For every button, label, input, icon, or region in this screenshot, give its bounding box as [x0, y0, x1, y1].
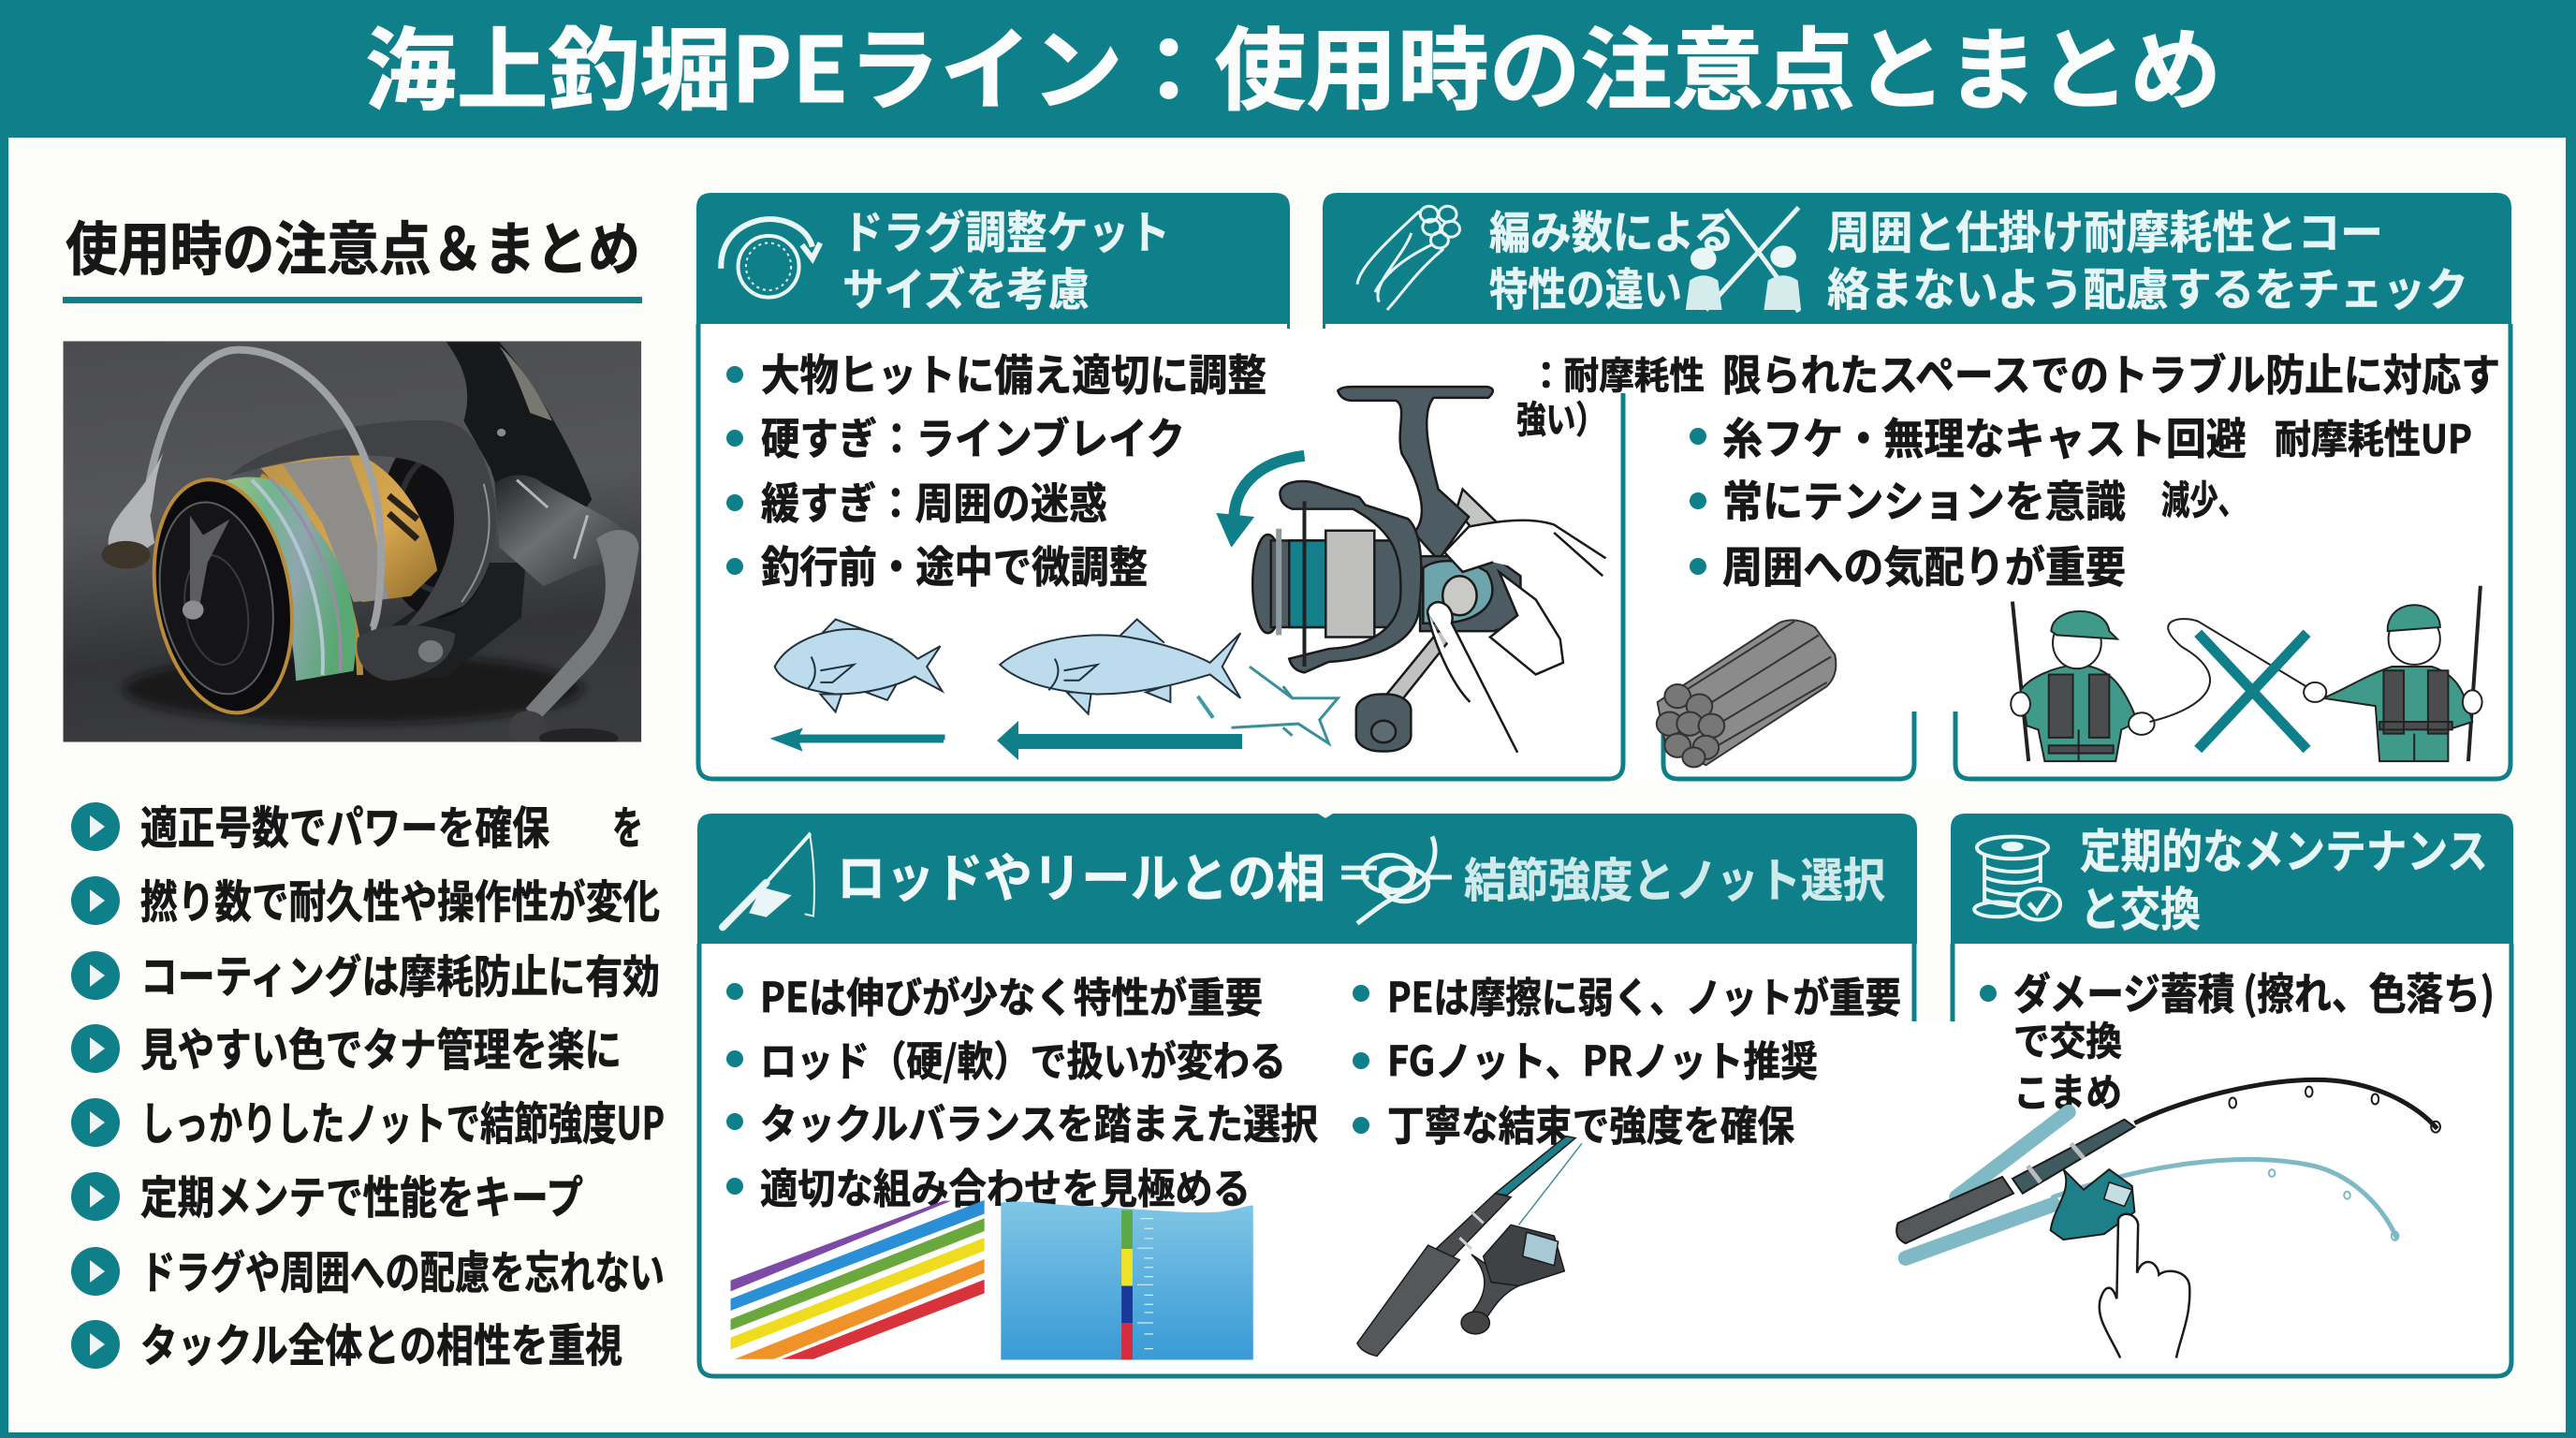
pointing hand — [2100, 1214, 2189, 1358]
panel body — [698, 324, 2510, 779]
overlay text: abrasion note: ：耐摩耗性 — [1529, 345, 1705, 400]
illustration: reel and hand adjusting drag — [1216, 387, 1606, 753]
list text: 定期メンテで性能をキープ — [140, 1161, 583, 1226]
arrow: large pull — [997, 721, 1242, 760]
list text: を — [612, 791, 643, 857]
bullets: drag: 緩すぎ：周囲の迷惑 — [761, 470, 1107, 532]
photo: spinning reel with multicolour PE line — [63, 341, 641, 748]
header: maintenance — [1951, 814, 2513, 944]
bullets: rod and reel — [726, 964, 1318, 1215]
list text — [140, 791, 665, 1374]
bullet dots — [726, 983, 743, 1195]
header text: knot: 結節強度とノット選択 — [1464, 844, 1885, 911]
bullet marker circles — [71, 802, 120, 1369]
icon: crossed-out anglers — [1686, 208, 1801, 312]
icon: drag dial — [721, 219, 820, 298]
panel: top row (drag adjustment / braid count / surroundings) — [696, 193, 2511, 779]
bullets: maintenance — [1980, 961, 2495, 1119]
bullets: maintenance: で交換 — [2013, 1010, 2122, 1067]
list text: しっかりしたノットで結節強度UP — [140, 1087, 665, 1152]
arrow: small pull — [774, 730, 944, 749]
header: braid count and line care: 特性の違い — [1489, 253, 1682, 318]
header text: 定期的なメンテナンス — [2080, 814, 2488, 882]
bullets: drag — [726, 342, 1266, 595]
X mark — [2198, 633, 2307, 749]
list text: 適正号数でパワーを確保 — [140, 791, 549, 857]
header text: ドラグ調整ケット — [842, 196, 1170, 261]
overlay text: abrasion note — [1516, 345, 1705, 444]
list text: コーティングは摩耗防止に有効 — [140, 940, 660, 1005]
icon: rod and reel — [723, 833, 814, 927]
bullets: drag: 硬すぎ：ラインブレイク — [761, 405, 1185, 467]
bullets: rod and reel: ロッド（硬/軟）で扱いが変わる — [760, 1028, 1286, 1088]
bullets: maintenance: こまめ — [2013, 1062, 2122, 1119]
bullet dots — [1353, 985, 1369, 1134]
icon: line spool with check — [1974, 837, 2060, 919]
list text: ドラグや周囲への配慮を忘れない — [140, 1236, 665, 1301]
bullets: surroundings — [1690, 342, 2500, 595]
left heading: 使用時の注意点＆まとめ — [66, 202, 640, 286]
bullets: knots: PEは摩擦に弱く、ノットが重要 — [1387, 964, 1901, 1024]
bullets: knots: 丁寧な結束で強度を確保 — [1387, 1093, 1794, 1152]
illustration: fish and drag arrows — [775, 620, 1338, 743]
panel body — [699, 944, 2511, 1376]
rod shadow — [1906, 1112, 2398, 1258]
bullets: surroundings: 糸フケ・無理なキャスト回避 — [1722, 405, 2247, 467]
panel borders — [699, 944, 2511, 1376]
panel borders — [698, 324, 2510, 779]
bullets: knots — [1353, 964, 1901, 1152]
header: rod & reel match and knot selection — [697, 814, 1917, 944]
header: braid count and line care — [1323, 193, 2511, 329]
list text: 見やすい色でタナ管理を楽に — [140, 1013, 622, 1078]
header text: rod: ロッドやリールとの相 — [837, 837, 1325, 913]
bullet dots — [726, 366, 743, 575]
panel: left summary column — [63, 202, 665, 1374]
bullets: rod and reel: PEは伸びが少なく特性が重要 — [760, 964, 1263, 1024]
illustration: rod with spinning reel — [1357, 1137, 1582, 1357]
icon: braided line — [1357, 206, 1459, 310]
tangled line — [2149, 619, 2320, 722]
title: 海上釣堀PEライン：使用時の注意点とまとめ — [365, 0, 2221, 128]
angler right — [2304, 586, 2482, 761]
bullet dots — [1690, 428, 1706, 575]
bullets: surroundings: 限られたスペースでのトラブル防止に対応す — [1722, 342, 2500, 404]
illustration: braided strand bundle — [1657, 620, 1836, 767]
bullet dot — [1980, 985, 1997, 1002]
rod — [1896, 1079, 2440, 1243]
bullets: rod and reel: タックルバランスを踏まえた選択 — [760, 1091, 1318, 1151]
angler left — [2011, 602, 2155, 761]
bullet marker arrows — [90, 815, 105, 1356]
panel: bottom row (rod/reel match, knots, maintenance) — [697, 814, 2513, 1376]
bullets: rod and reel: 適切な組み合わせを見極める — [760, 1155, 1251, 1215]
illustration: bent rod with check by finger — [1896, 1079, 2440, 1358]
icon: knot — [1341, 837, 1452, 923]
header: drag adjustment — [696, 193, 1290, 329]
bullets: drag: 大物ヒットに備え適切に調整 — [761, 342, 1266, 404]
overlay text: abrasion note: 強い） — [1516, 389, 1605, 444]
header: braid count and line care: 周囲と仕掛け耐摩耗性とコー — [1827, 196, 2383, 261]
illustration: water depth scale with colour-coded line — [1001, 1202, 1253, 1359]
bullets: drag: 釣行前・途中で微調整 — [761, 534, 1148, 595]
bullets: surroundings: 常にテンションを意識 — [1722, 468, 2126, 530]
illustration: coloured line strands — [731, 1200, 985, 1359]
illustration: anglers with crossed line and X mark — [2011, 586, 2482, 761]
bullets: maintenance: ダメージ蓄積 (擦れ、色落ち) — [2013, 961, 2495, 1022]
header: maintenance: と交換 — [2080, 873, 2201, 940]
bullets: knots: FGノット、PRノット推奨 — [1387, 1028, 1818, 1088]
header: braid count and line care: 絡まないよう配慮するをチェック — [1827, 253, 2468, 318]
list text: 撚り数で耐久性や操作性が変化 — [140, 865, 660, 931]
bullets: surroundings: 耐摩耗性UP — [2275, 408, 2472, 465]
bullets: surroundings: 周囲への気配りが重要 — [1722, 534, 2126, 595]
header: drag adjustment: サイズを考慮 — [842, 253, 1090, 318]
heading underline — [63, 297, 642, 303]
bullet list: key points — [71, 791, 665, 1374]
list text: タックル全体との相性を重視 — [140, 1309, 622, 1374]
bullets: surroundings: 減少、 — [2161, 469, 2247, 526]
header text: 編み数による — [1489, 196, 1734, 261]
